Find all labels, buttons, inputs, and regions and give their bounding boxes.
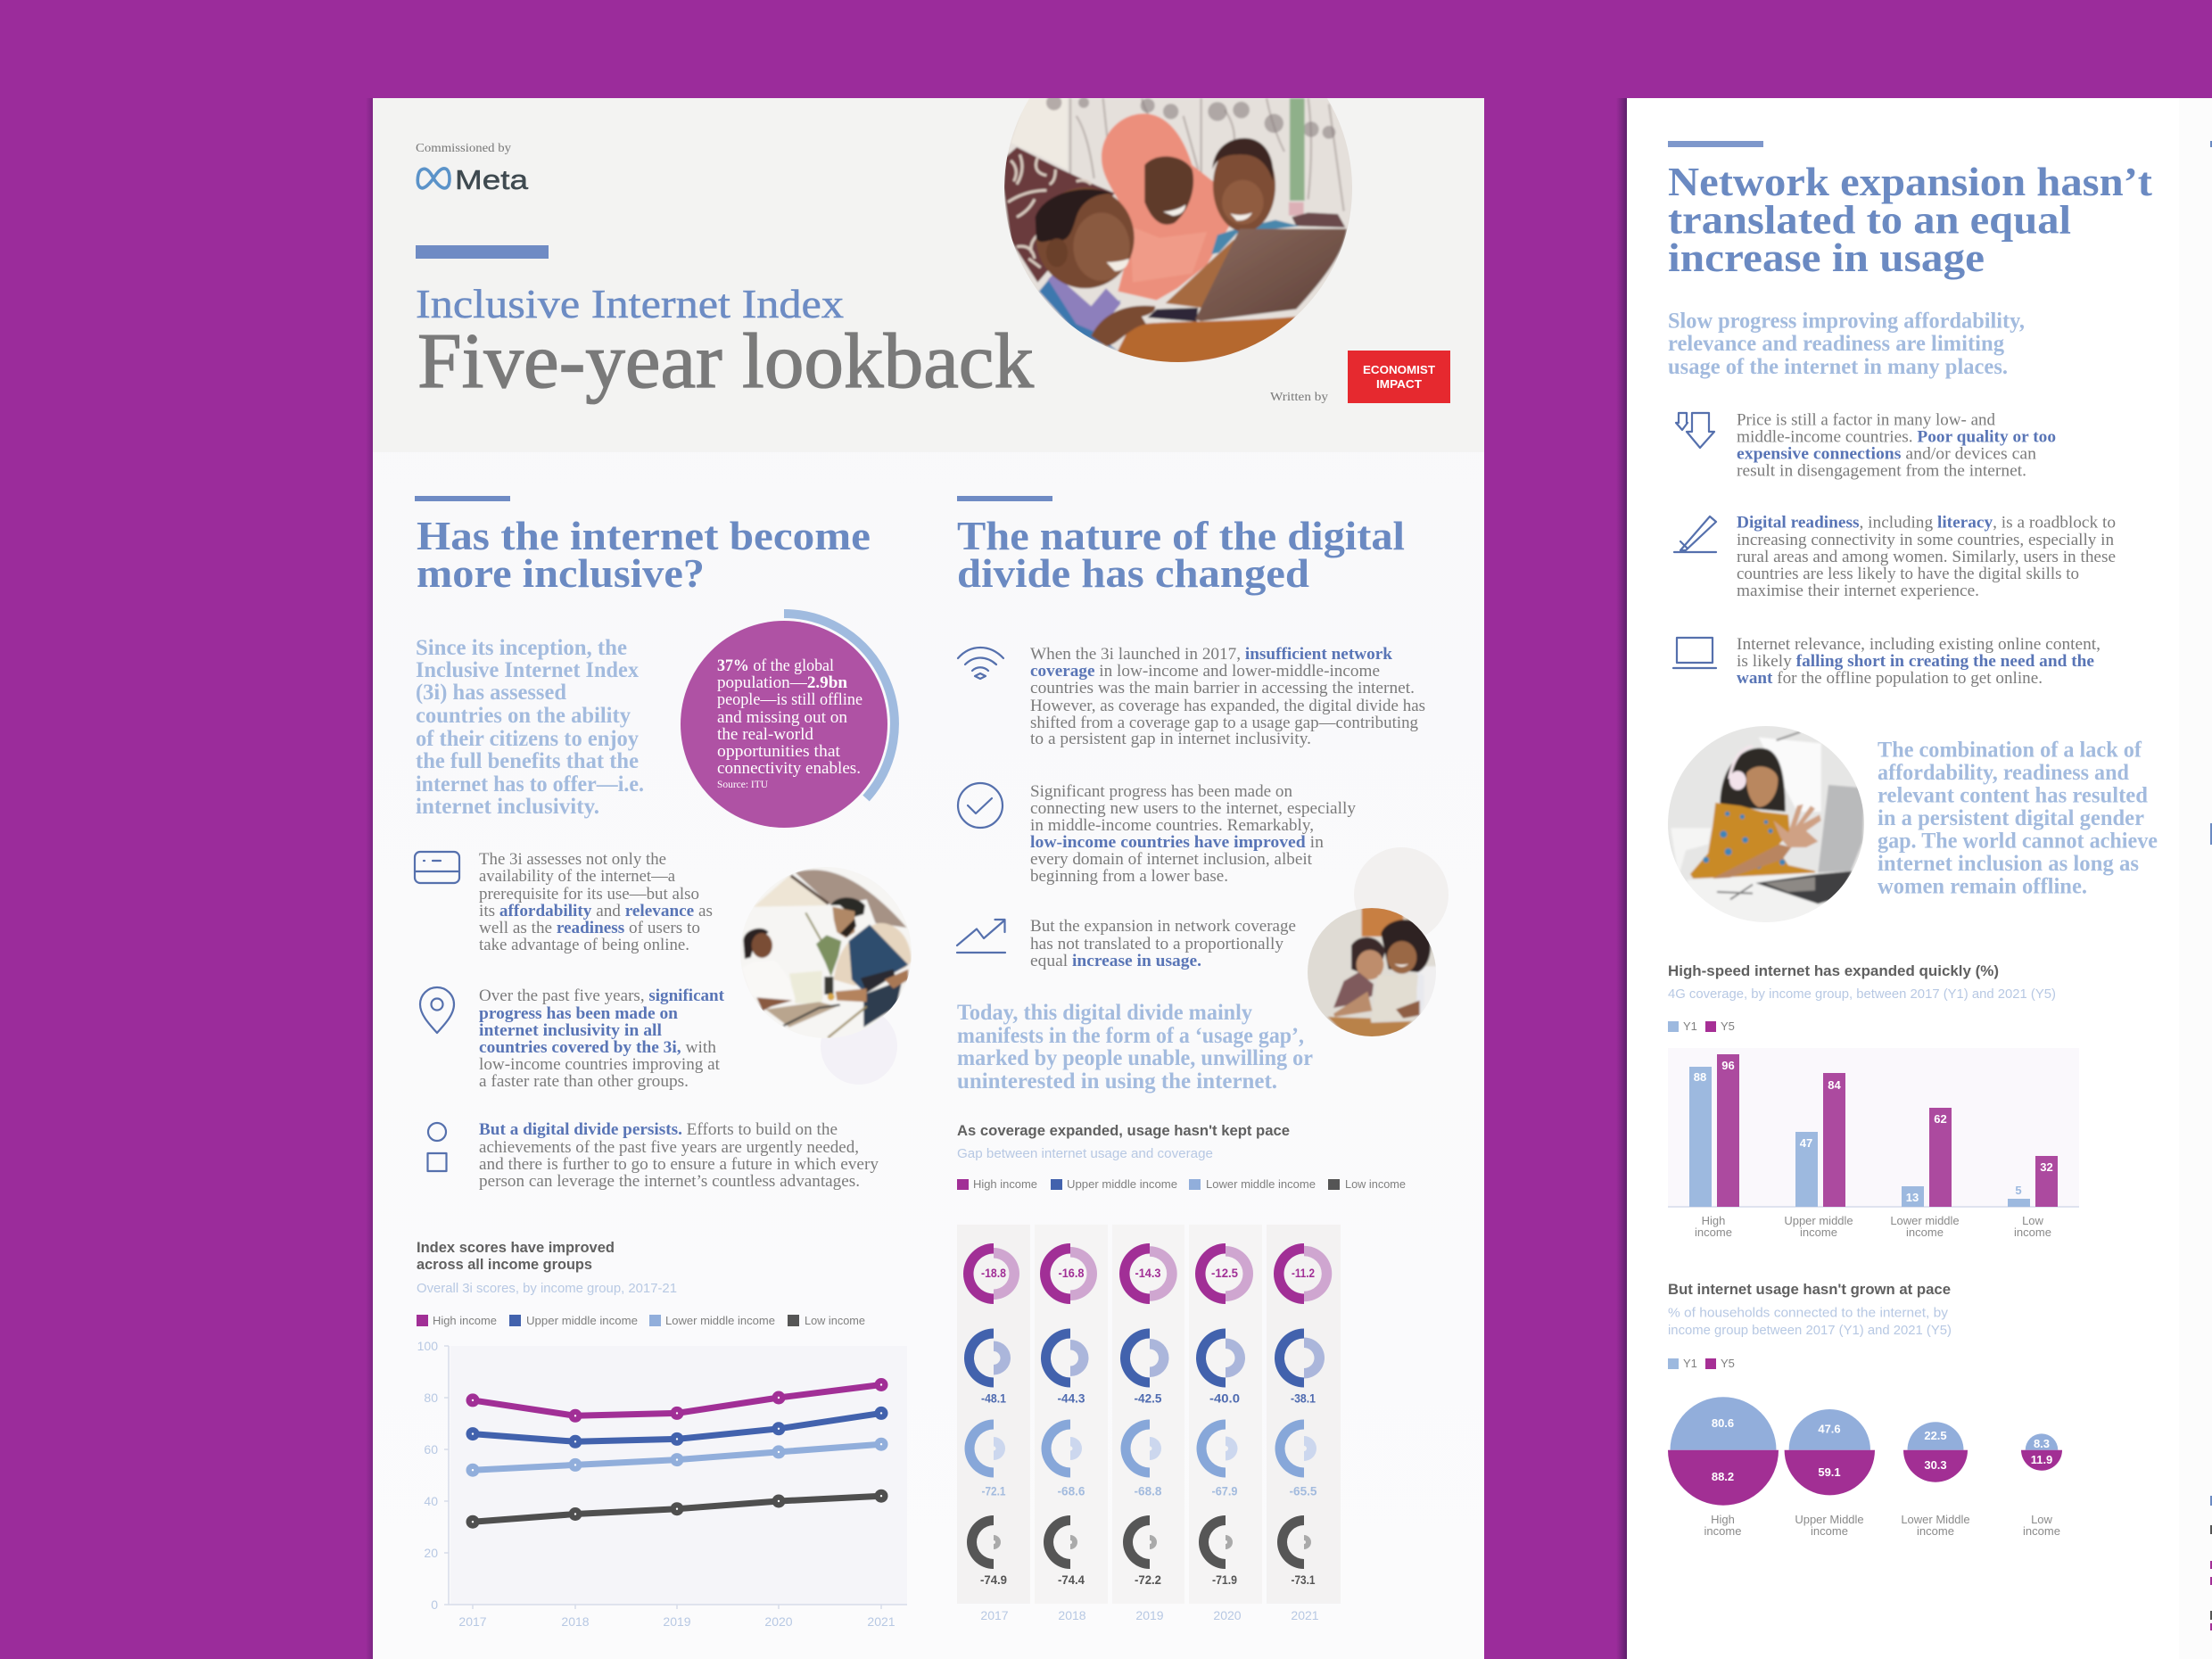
heading: nature of the digital divide: divide has changed xyxy=(957,550,1309,596)
bar chart: 4G coverage: income xyxy=(2014,1226,2051,1239)
chart heading: coverage vs usage xyxy=(957,1122,1290,1161)
heading: network expansion xyxy=(1668,159,2153,280)
callout: 37% offline: and missing out on xyxy=(717,709,847,727)
intro text block: of their citizens to enjoy xyxy=(416,727,639,751)
chart heading: internet usage: income group between 2017 (Y1) and 2021 (Y5) xyxy=(1668,1323,1952,1338)
text: price: result in disengagement from the internet. xyxy=(1737,462,2026,480)
bar chart: 4G coverage: income xyxy=(1800,1226,1837,1239)
callout: 37% offline: Source: ITU xyxy=(717,778,768,790)
chart: half circles of household connections: Lower Middle xyxy=(1901,1513,1970,1526)
column: 2017: -18.8 xyxy=(981,1266,1006,1280)
intro text block: (3i) has assessed xyxy=(416,681,566,705)
chart heading: internet usage: But internet usage hasn't grown at pace xyxy=(1668,1281,1951,1298)
callout: 37% offline: opportunities that xyxy=(717,743,841,761)
icon: laptop xyxy=(1673,638,1716,668)
text: internet relevance xyxy=(1737,636,2101,688)
chart: half circles of household connections: income xyxy=(1811,1524,1848,1538)
quote: digital gender gap: The combination of a lack of xyxy=(1878,739,2142,762)
heading: nature of the digital divide: The nature of the digital xyxy=(957,513,1405,558)
line chart: index scores: 40 xyxy=(424,1494,438,1508)
bar chart: 4G coverage: 32 xyxy=(2040,1160,2053,1174)
column: 2018 xyxy=(1035,1225,1108,1622)
text: digital divide persists xyxy=(479,1121,879,1191)
line chart: index scores: 2017 xyxy=(458,1614,487,1629)
commissioned by label: Commissioned by xyxy=(416,142,511,155)
icon: wifi xyxy=(958,648,1003,679)
chart: half circles of household connections: 59.1 xyxy=(1818,1465,1841,1479)
text: price: Price is still a factor in many low- and xyxy=(1737,412,1996,430)
column: 2017: -48.1 xyxy=(981,1391,1006,1406)
column: 2017: -74.9 xyxy=(980,1572,1007,1587)
chart: half circles of household connections: 47.6 xyxy=(1818,1422,1841,1436)
column: 2021: -38.1 xyxy=(1291,1391,1316,1406)
text: 3i assesses: The 3i assesses not only the xyxy=(479,851,666,869)
legend: Y1 Y5: Y5 xyxy=(1721,1357,1735,1370)
legend: Y1 Y5 xyxy=(1668,1019,1735,1033)
text: significant progress: internet inclusivity in all xyxy=(479,1022,662,1040)
line chart: index scores: 2021 xyxy=(867,1614,896,1629)
legend: Y1 Y5: Y1 xyxy=(1683,1357,1697,1370)
quote: digital gender gap: relevant content has resulted xyxy=(1878,783,2148,808)
heading: has the internet become more inclusive: more inclusive? xyxy=(417,550,705,596)
column: 2021 xyxy=(1267,1225,1341,1622)
photo: mother and daughter with tablet xyxy=(1308,908,1436,1036)
chart: half circles of household connections: Upper Middle xyxy=(1795,1513,1864,1526)
intro text block: internet inclusivity. xyxy=(416,795,599,819)
text: 3i assesses: well as the readiness of users to xyxy=(479,920,700,937)
heading: network expansion: Network expansion hasn’t xyxy=(1668,159,2153,204)
line chart: index scores: 2019 xyxy=(663,1614,691,1629)
text: insufficient network coverage xyxy=(1030,646,1425,748)
legend: coverage vs usage: High income xyxy=(973,1177,1037,1191)
legend: coverage vs usage: Low income xyxy=(1345,1177,1406,1191)
callout: 37% offline: connectivity enables. xyxy=(717,760,861,778)
column: 2017: -72.1 xyxy=(981,1484,1006,1498)
text: insufficient network coverage: shifted from a coverage gap to a usage gap—contributing xyxy=(1030,714,1418,732)
subheading: slow progress: usage of the internet in many places. xyxy=(1668,355,2008,379)
intro text block: the full benefits that the xyxy=(416,749,639,773)
text: digital divide persists: achievements of the past five years are urgently needed, xyxy=(479,1139,859,1157)
text: significant progress: countries covered by the 3i, with xyxy=(479,1039,716,1057)
quote: usage gap: manifests in the form of a ‘usage gap’, xyxy=(957,1024,1304,1048)
line chart: index scores: 20 xyxy=(424,1546,438,1560)
column: 2019 xyxy=(1112,1225,1184,1622)
text: significant progress xyxy=(479,987,725,1091)
text: digital readiness: rural areas and among women. Similarly, users in these xyxy=(1737,549,2116,566)
text: significant progress: progress has been made on xyxy=(479,1005,679,1023)
icon: location pin xyxy=(420,987,454,1033)
intro text block xyxy=(416,636,644,819)
line chart: index scores: 2020 xyxy=(764,1614,793,1629)
title: Five-year lookback xyxy=(417,318,1034,405)
text: digital readiness: maximise their internet experience. xyxy=(1737,582,1979,600)
column: 2020: 2020 xyxy=(1213,1608,1242,1622)
column: 2017: 2017 xyxy=(980,1608,1009,1622)
chart heading: high-speed internet: 4G coverage, by income group, between 2017 (Y1) and 2021 (Y5) xyxy=(1668,986,2056,1002)
text: significant progress connecting users: connecting new users to the internet, especially xyxy=(1030,800,1357,818)
subheading: slow progress: Slow progress improving affordability, xyxy=(1668,309,2025,334)
icon: Meta logo xyxy=(417,164,529,195)
quote: usage gap xyxy=(957,1001,1313,1094)
text: significant progress: a faster rate than other groups. xyxy=(479,1073,689,1091)
column: 2017 xyxy=(957,1225,1030,1622)
text: 3i assesses: availability of the internet—a xyxy=(479,868,675,886)
text: price xyxy=(1737,412,2056,480)
column: 2018: 2018 xyxy=(1058,1608,1086,1622)
text: digital readiness xyxy=(1737,514,2116,600)
text: insufficient network coverage: However, as coverage has expanded, the digital divide has xyxy=(1030,697,1425,715)
column: 2018: -68.6 xyxy=(1058,1484,1085,1498)
intro text block: Since its inception, the xyxy=(416,636,627,660)
column: 2020: -40.0 xyxy=(1209,1391,1240,1406)
icon: down arrows xyxy=(1676,413,1714,448)
legend: coverage vs usage: Lower middle income xyxy=(1206,1177,1316,1191)
callout: 37% offline xyxy=(681,614,895,828)
text: internet relevance: is likely falling short in creating the need and the xyxy=(1737,653,2094,671)
text: digital readiness: increasing connectivity in some countries, especially in xyxy=(1737,532,2114,549)
heading: network expansion: translated to an equal xyxy=(1668,196,2071,243)
chart: half circles of household connections: Low xyxy=(2031,1513,2053,1526)
bar chart: 4G coverage: Upper middle xyxy=(1784,1214,1853,1227)
callout: 37% offline: the real-world xyxy=(717,726,814,744)
logo: Economist Impact xyxy=(1348,351,1450,403)
chart: gap donuts by year xyxy=(957,1225,1341,1622)
panel: header band xyxy=(373,98,1484,452)
bar chart: 4G coverage: income xyxy=(1695,1226,1732,1239)
quote: digital gender gap: internet inclusion as long as xyxy=(1878,852,2139,876)
chart: half circles of household connections: 80.6 xyxy=(1712,1416,1734,1430)
text: significant progress connecting users: Significant progress has been made on xyxy=(1030,783,1292,801)
line chart: index scores: 2018 xyxy=(561,1614,590,1629)
photo: family with laptop xyxy=(999,95,1356,366)
chart: half circles of household connections: 11.9 xyxy=(2031,1453,2052,1466)
section accent bar xyxy=(415,496,510,501)
text: expansion in network coverage xyxy=(1030,918,1296,970)
text: significant progress connecting users xyxy=(1030,783,1357,886)
bar chart: 4G coverage: 88 xyxy=(1694,1070,1706,1084)
line chart: index scores xyxy=(417,1339,907,1629)
bar chart: 4G coverage: Lower middle xyxy=(1890,1214,1960,1227)
chart heading: index scores: Overall 3i scores, by income group, 2017-21 xyxy=(417,1281,677,1296)
text: 3i assesses: take advantage of being online. xyxy=(479,937,689,954)
text: digital readiness: countries are less likely to have the digital skills to xyxy=(1737,565,2079,583)
icon: circle and square xyxy=(428,1123,446,1171)
legend: Y1 Y5: Y5 xyxy=(1721,1019,1735,1033)
written by label: Written by xyxy=(1270,391,1328,404)
text: significant progress connecting users: in middle-income countries. Remarkably, xyxy=(1030,817,1314,835)
quote: digital gender gap xyxy=(1878,739,2158,899)
legend: Y1 Y5 xyxy=(1668,1357,1735,1370)
line chart: index scores: 60 xyxy=(424,1442,438,1457)
text: internet relevance: Internet relevance, including existing online content, xyxy=(1737,636,2101,654)
text: digital divide persists: But a digital divide persists. Efforts to build on the xyxy=(479,1121,838,1139)
bar chart: 4G coverage: High xyxy=(1702,1214,1725,1227)
column: 2020: -71.9 xyxy=(1212,1572,1237,1587)
chart heading: index scores: Index scores have improved xyxy=(417,1239,615,1256)
text: insufficient network coverage: coverage in low-income and lower-middle-income xyxy=(1030,663,1380,681)
legend: index scores xyxy=(417,1314,865,1327)
text: significant progress: low-income countries improving at xyxy=(479,1056,721,1074)
column: 2018: -74.4 xyxy=(1058,1572,1085,1587)
decorative pale circle xyxy=(1354,847,1449,942)
bar chart: 4G coverage: 47 xyxy=(1800,1136,1812,1150)
text: significant progress connecting users: low-income countries have improved in xyxy=(1030,834,1324,852)
callout: 37% offline: people—is still offline xyxy=(717,691,863,709)
bar chart: 4G coverage: 96 xyxy=(1721,1059,1735,1072)
text: internet relevance: want for the offline population to get online. xyxy=(1737,670,2043,688)
text: significant progress: Over the past five years, significant xyxy=(479,987,725,1005)
text: significant progress connecting users: beginning from a lower base. xyxy=(1030,868,1228,886)
column: 2019: -72.2 xyxy=(1135,1572,1161,1587)
text: expansion in network coverage: has not translated to a proportionally xyxy=(1030,936,1284,953)
bar chart: 4G coverage: 13 xyxy=(1906,1191,1919,1204)
callout: 37% offline: 37% of the global xyxy=(717,657,834,675)
logo: Economist Impact: ECONOMIST xyxy=(1363,363,1435,376)
column: 2019: 2019 xyxy=(1135,1608,1164,1622)
photo: cafe owners xyxy=(740,867,912,1038)
text: 3i assesses: prerequisite for its use—but also xyxy=(479,886,699,904)
chart heading: index scores xyxy=(417,1239,677,1296)
chart: half circles of household connections: 88.2 xyxy=(1712,1470,1734,1483)
chart heading: coverage vs usage: As coverage expanded, usage hasn't kept pace xyxy=(957,1122,1290,1139)
column: 2018: -44.3 xyxy=(1058,1391,1085,1406)
column: 2021: -73.1 xyxy=(1292,1572,1316,1587)
quote: usage gap: uninterested in using the internet. xyxy=(957,1069,1277,1094)
legend: index scores: Upper middle income xyxy=(526,1314,638,1327)
column: 2020: -12.5 xyxy=(1211,1266,1238,1280)
quote: digital gender gap: gap. The world cannot achieve xyxy=(1878,830,2158,853)
legend: coverage vs usage: Upper middle income xyxy=(1067,1177,1177,1191)
title xyxy=(416,281,1034,405)
decorative pale circle xyxy=(821,1008,897,1085)
bar chart: 4G coverage: Low xyxy=(2022,1214,2044,1227)
intro text block: internet has to offer—i.e. xyxy=(416,772,644,796)
chart heading: internet usage xyxy=(1668,1281,1952,1338)
text: expansion in network coverage: equal increase in usage. xyxy=(1030,953,1201,970)
heading: has the internet become more inclusive xyxy=(417,513,871,596)
chart: half circles of household connections: income xyxy=(2023,1524,2060,1538)
chart: half circles of household connections: income xyxy=(1917,1524,1954,1538)
legend: index scores: Low income xyxy=(805,1314,865,1327)
column: 2021: 2021 xyxy=(1291,1608,1319,1622)
bar chart: 4G coverage xyxy=(1668,1048,2079,1239)
column: 2021: -65.5 xyxy=(1290,1484,1317,1498)
text: digital readiness: Digital readiness , including literacy, is a roadblock to xyxy=(1737,514,2116,532)
text: digital divide persists: and there is further to go to ensure a future in which every xyxy=(479,1156,879,1174)
logo: Economist Impact: IMPACT xyxy=(1376,377,1422,391)
text: insufficient network coverage: countries was the main barrier in accessing the internet. xyxy=(1030,680,1415,697)
chart: half circles of household connections: income xyxy=(1704,1524,1741,1538)
column: 2021: -11.2 xyxy=(1292,1266,1315,1280)
heading: network expansion: increase in usage xyxy=(1668,235,1985,280)
photo: girl with headphones and laptop xyxy=(1663,722,1869,928)
legend: index scores: High income xyxy=(433,1314,497,1327)
column: 2019: -68.8 xyxy=(1135,1484,1162,1498)
section accent bar xyxy=(957,496,1052,501)
bar chart: 4G coverage: 62 xyxy=(1934,1112,1947,1126)
intro text block: Inclusive Internet Index xyxy=(416,658,639,682)
text: price: middle-income countries. Poor quality or too xyxy=(1737,428,2056,446)
line chart: index scores: 100 xyxy=(417,1339,438,1353)
callout: 37% offline: population—2.9bn xyxy=(717,674,848,692)
subheading: slow progress xyxy=(1668,309,2025,379)
text: significant progress connecting users: every domain of internet inclusion, albeit xyxy=(1030,851,1313,869)
bar chart: 4G coverage: income xyxy=(1906,1226,1944,1239)
line chart: index scores: 0 xyxy=(431,1597,438,1612)
title: Inclusive Internet Index xyxy=(416,281,844,326)
quote: digital gender gap: in a persistent digital gender xyxy=(1878,806,2144,830)
icon: card xyxy=(415,852,459,883)
chart: half circles of household connections xyxy=(1668,1397,2062,1538)
chart: half circles of household connections: 30.3 xyxy=(1924,1458,1947,1472)
column: 2020 xyxy=(1189,1225,1262,1622)
column: 2020: -67.9 xyxy=(1211,1484,1238,1498)
bar chart: 4G coverage: 84 xyxy=(1828,1078,1841,1092)
panel: main page xyxy=(366,98,1484,1659)
text: expansion in network coverage: But the expansion in network coverage xyxy=(1030,918,1296,936)
intro text block: countries on the ability xyxy=(416,704,631,728)
quote: digital gender gap: affordability, readiness and xyxy=(1878,761,2129,785)
section accent bar xyxy=(1668,141,1763,147)
subheading: slow progress: relevance and readiness are limiting xyxy=(1668,332,2004,356)
quote: usage gap: Today, this digital divide mainly xyxy=(957,1001,1252,1025)
column: 2019: -14.3 xyxy=(1135,1266,1161,1280)
chart heading: high-speed internet: High-speed internet has expanded quickly (%) xyxy=(1668,962,1999,979)
panel: second page xyxy=(1616,98,2212,1659)
chart: half circles of household connections: High xyxy=(1711,1513,1735,1526)
heading: nature of the digital divide xyxy=(957,513,1405,596)
text: 3i assesses: its affordability and relevance as xyxy=(479,903,713,920)
chart heading: index scores: across all income groups xyxy=(417,1256,592,1273)
text: price: expensive connections and/or devices can xyxy=(1737,446,2036,464)
column: 2018: -16.8 xyxy=(1058,1266,1085,1280)
line chart: index scores: 80 xyxy=(424,1391,438,1405)
quote: usage gap: marked by people unable, unwilling or xyxy=(957,1046,1313,1070)
text: 3i assesses xyxy=(479,851,713,954)
legend: coverage vs usage xyxy=(957,1177,1406,1191)
icon: pencil xyxy=(1674,516,1716,552)
chart heading: coverage vs usage: Gap between internet usage and coverage xyxy=(957,1146,1213,1161)
legend: Y1 Y5: Y1 xyxy=(1683,1019,1697,1033)
chart heading: internet usage: % of households connected to the internet, by xyxy=(1668,1306,1949,1320)
legend: index scores: Lower middle income xyxy=(665,1314,775,1327)
accent bar xyxy=(416,245,549,259)
quote: digital gender gap: women remain offline. xyxy=(1878,874,2087,899)
chart: half circles of household connections: 8.3 xyxy=(2034,1437,2050,1450)
text: digital divide persists: person can leverage the internet’s countless advantages. xyxy=(479,1173,860,1191)
bar chart: 4G coverage: 5 xyxy=(2015,1184,2022,1197)
icon: check circle xyxy=(958,783,1003,828)
chart: half circles of household connections: 22.5 xyxy=(1924,1429,1947,1442)
icon: Meta logo: Meta xyxy=(455,164,529,195)
text: insufficient network coverage: to a persistent gap in internet inclusivity. xyxy=(1030,730,1311,748)
icon: trend line xyxy=(957,920,1005,953)
heading: has the internet become more inclusive: Has the internet become xyxy=(417,513,871,558)
text: insufficient network coverage: When the 3i launched in 2017, insufficient network xyxy=(1030,646,1393,664)
column: 2019: -42.5 xyxy=(1135,1391,1162,1406)
chart heading: high-speed internet xyxy=(1668,962,2056,1002)
